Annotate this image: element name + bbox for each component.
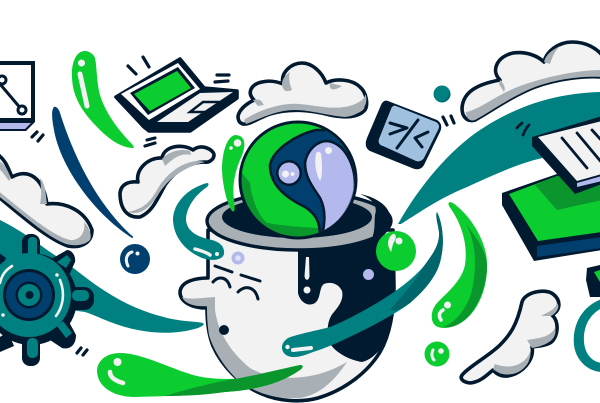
icon: blue swoosh <box>52 107 133 238</box>
lavender half <box>305 141 355 236</box>
drip highlight <box>304 257 310 280</box>
icon: teal swoosh over head <box>282 212 443 357</box>
icon: blue bubble <box>120 244 150 274</box>
icon: small green drop <box>222 135 244 211</box>
lavender bubble <box>232 252 244 264</box>
panel: cloud right <box>462 42 600 121</box>
icon: small green bubble <box>424 342 450 366</box>
panel: laptop <box>116 57 237 146</box>
panel: cloud left <box>0 153 92 247</box>
panel: green board <box>502 170 600 261</box>
highlights <box>315 152 322 181</box>
green half <box>242 124 354 236</box>
icon: teal curl <box>173 183 224 260</box>
small sphere <box>276 160 302 186</box>
head shading <box>182 297 347 398</box>
icon: gear <box>0 234 94 366</box>
icon: yin yang sphere <box>238 120 358 240</box>
panel: paper stack <box>532 116 600 194</box>
panel: rim <box>207 192 391 250</box>
icon: green swoosh bottom <box>97 353 303 397</box>
icon: teal dot <box>434 86 451 102</box>
panel: cloud small <box>120 146 214 217</box>
icon: green bubble <box>376 231 416 271</box>
icon: teal ring <box>574 299 600 372</box>
icon: green drop top <box>72 51 134 148</box>
panel: small board corner <box>586 265 600 297</box>
icon: green drop right <box>432 202 487 328</box>
icon: code window <box>366 101 454 169</box>
blue half <box>270 130 360 240</box>
face <box>215 266 260 281</box>
panel: cloud bottom right <box>461 291 559 383</box>
panel: big teal swoosh right <box>398 92 600 224</box>
panel: head <box>180 230 394 401</box>
hair <box>298 235 394 362</box>
panel: big teal swoosh left <box>0 220 204 333</box>
head body <box>180 230 394 401</box>
panel: chart card <box>0 61 43 141</box>
panel: cloud top <box>238 63 367 124</box>
